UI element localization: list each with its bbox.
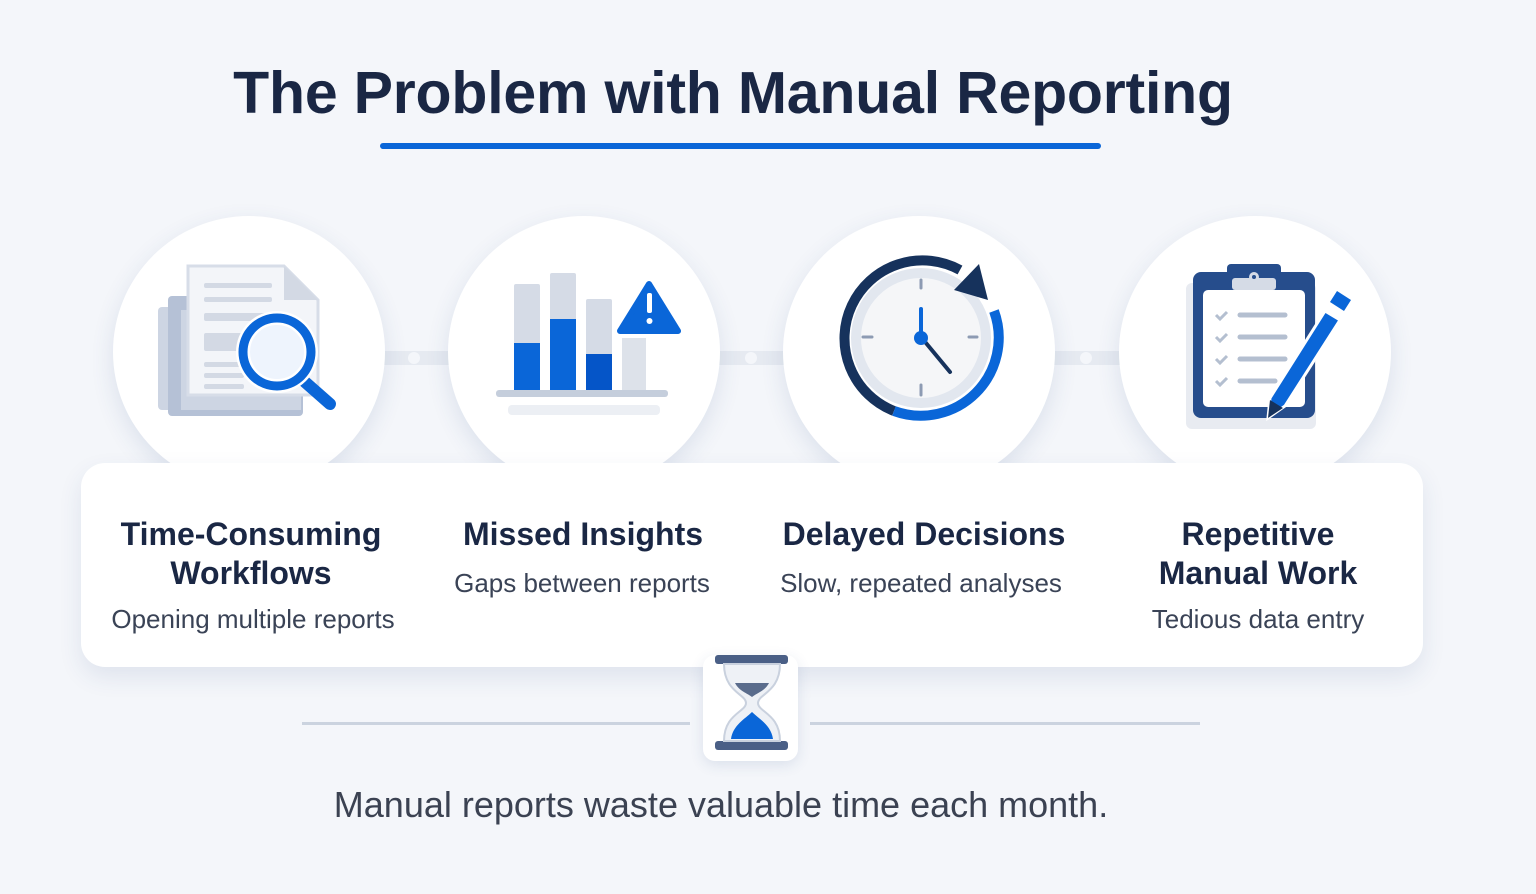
- item 1 text: Opening multiple reports: [111, 604, 395, 634]
- item 1 text: [111, 516, 395, 634]
- item 2 text: Missed Insights: [463, 516, 703, 552]
- connector line: [300, 351, 1200, 365]
- circle 4: clipboard icon: [1119, 216, 1391, 488]
- icon: hourglass: [703, 655, 798, 761]
- title underline: [380, 143, 1101, 149]
- footer message: Manual reports waste valuable time each month.: [334, 784, 1108, 825]
- item 2 text: Gaps between reports: [454, 568, 710, 598]
- circle 2: bar chart warning icon: [448, 216, 720, 488]
- item 1 text: Time-Consuming Workflows: [121, 516, 381, 591]
- item 4 text: Tedious data entry: [1152, 604, 1364, 634]
- item 2 text: [454, 516, 710, 598]
- divider lines: [302, 722, 1200, 725]
- item 3 text: Slow, repeated analyses: [780, 568, 1062, 598]
- circle 1: document search icon: [113, 216, 385, 488]
- item 4 text: [1152, 516, 1364, 634]
- item 3 text: [780, 516, 1065, 598]
- item 3 text: Delayed Decisions: [783, 516, 1065, 552]
- item 4 text: Repetitive Manual Work: [1159, 516, 1357, 591]
- title: The Problem with Manual Reporting: [233, 60, 1233, 126]
- text card: [81, 463, 1423, 667]
- circle 3: clock icon: [783, 216, 1055, 488]
